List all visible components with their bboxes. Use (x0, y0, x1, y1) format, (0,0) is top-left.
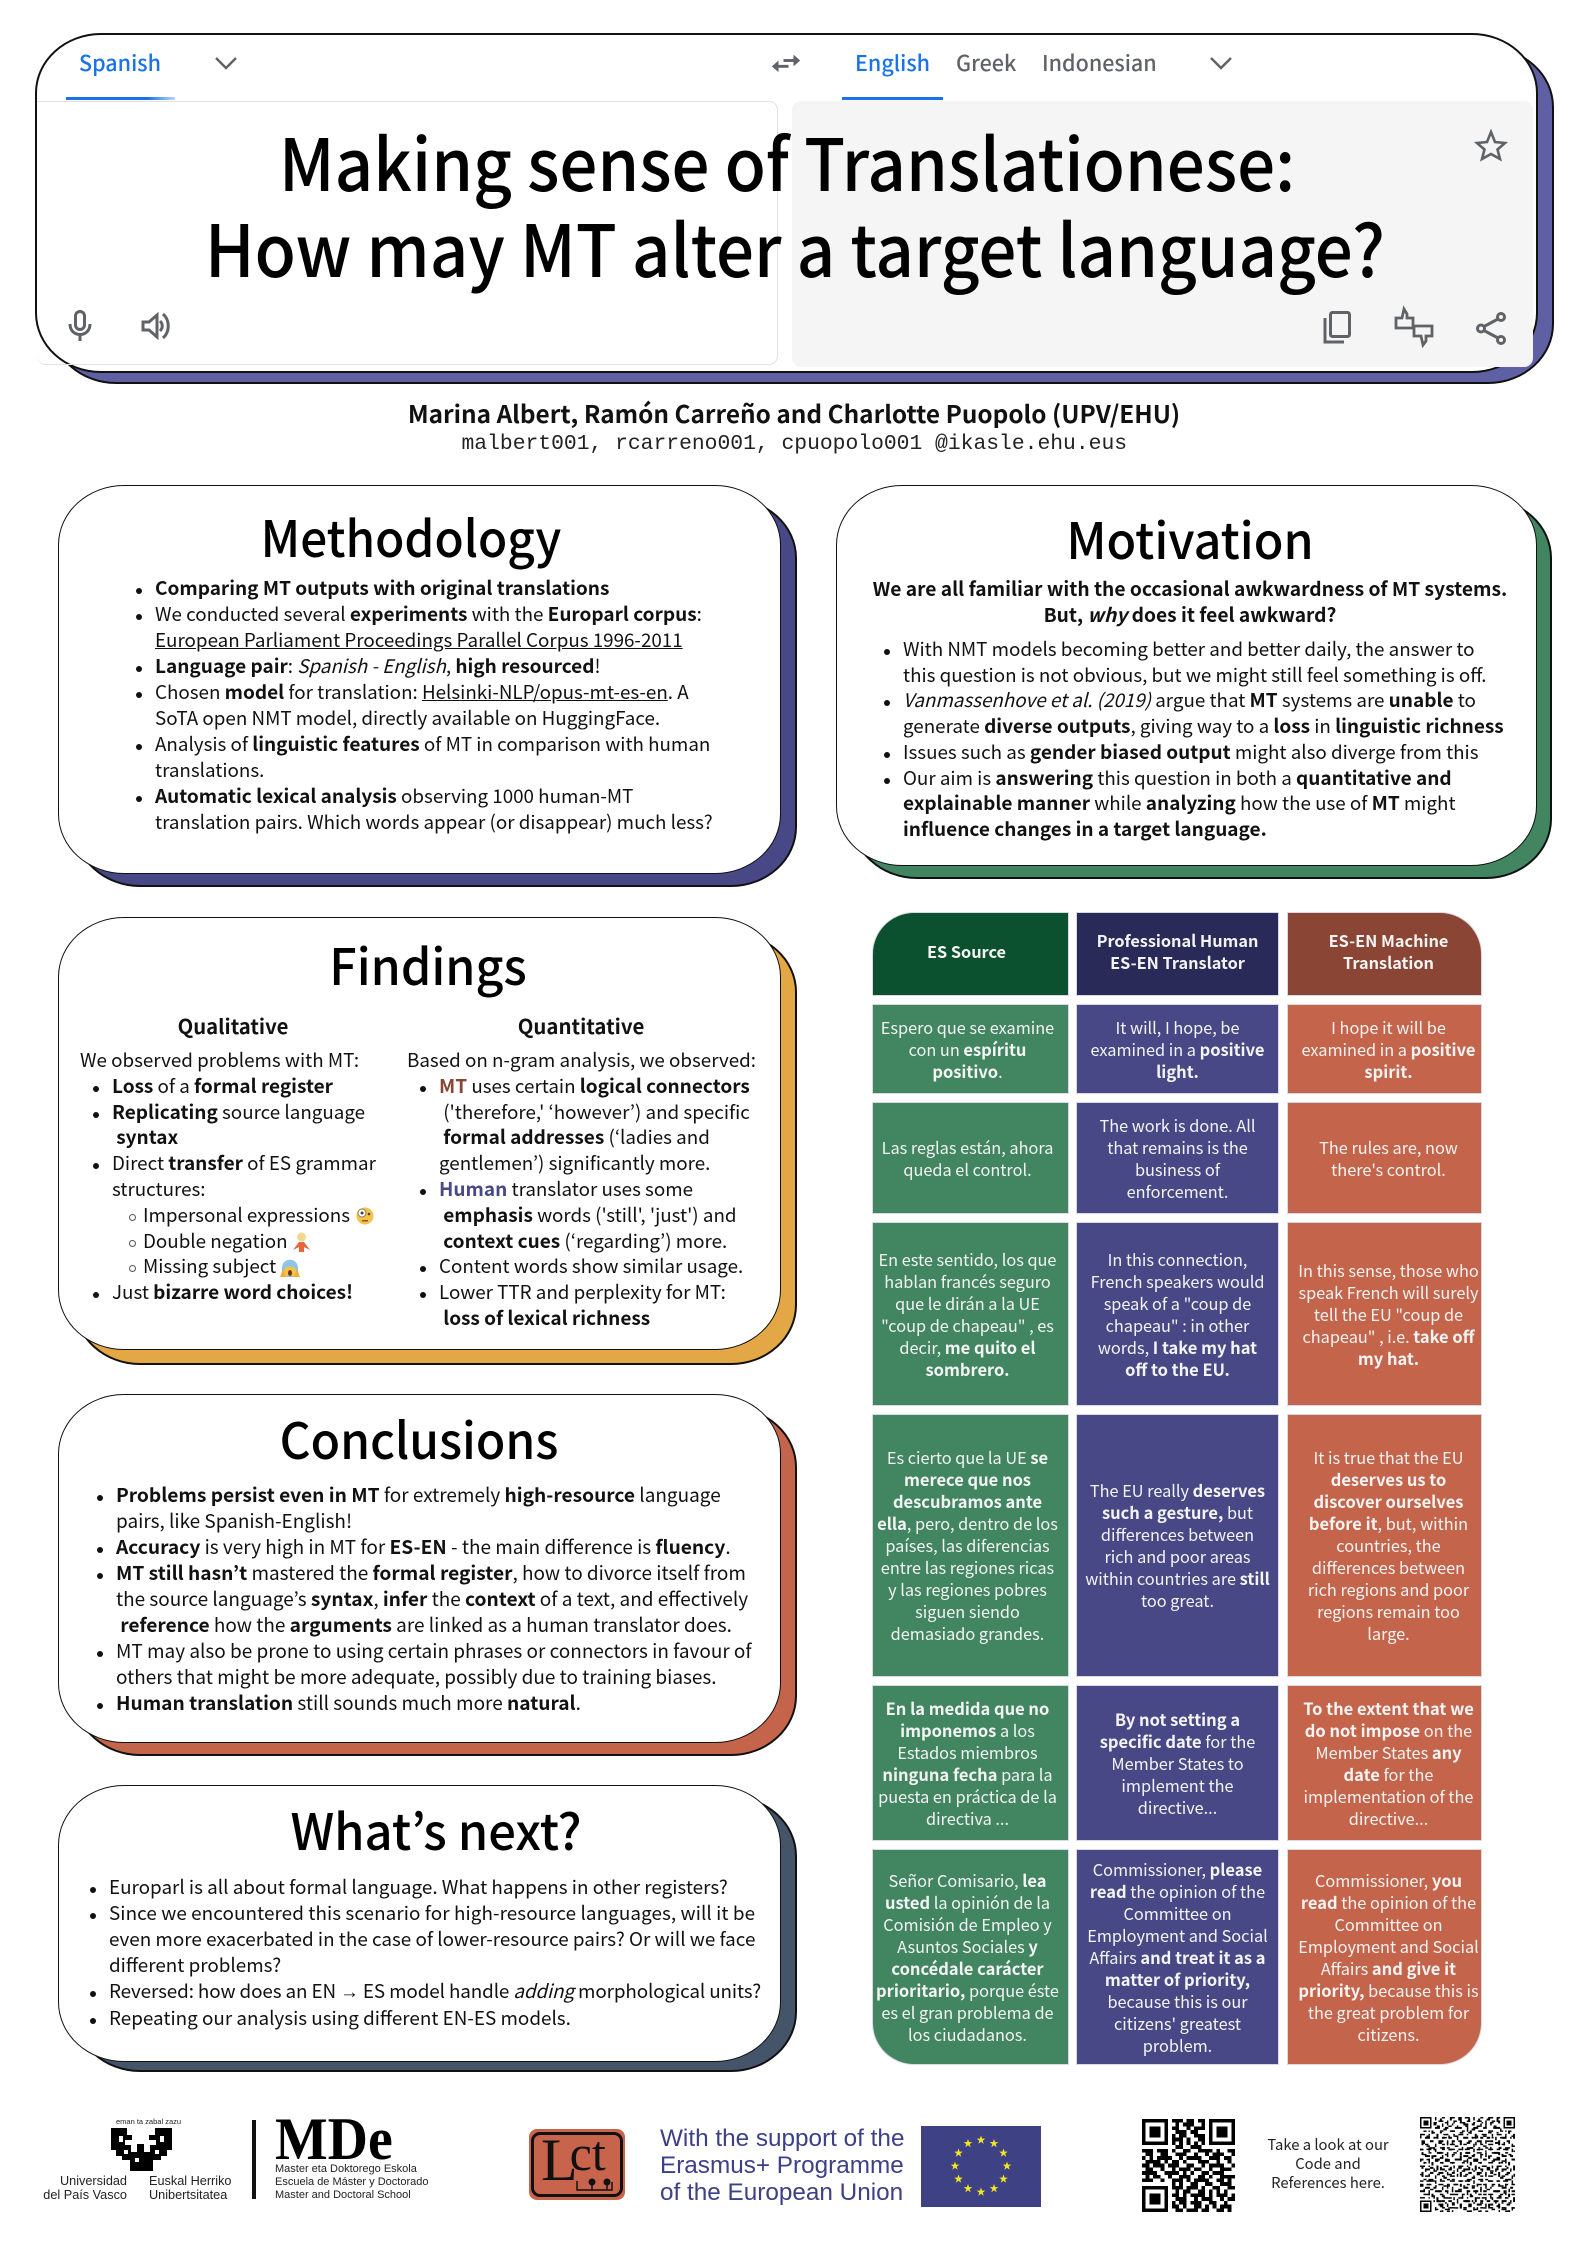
row 6 human: Employment and Social (1087, 1922, 1268, 1946)
row 3 machine: speak French will surely (1298, 1280, 1478, 1304)
column header: Professional Human ES-EN Translator (1076, 912, 1279, 996)
row 4 machine (1287, 1414, 1482, 1677)
school names (275, 2163, 428, 2201)
footer logo: University of the Basque Country (43, 2117, 232, 2202)
qualitative column text: structures: (112, 1175, 206, 1202)
motivation bullet list: generate diverse outputs, giving way to a loss in linguistic richness (903, 712, 1504, 739)
row 6 machine: Commissioner, you (1315, 1868, 1462, 1892)
conclusions bullet list: Human translation still sounds much more natural. (116, 1688, 581, 1716)
motivation bullet list: Issues such as gender biased output might also diverge from this (903, 738, 1479, 765)
row 1 machine: spirit. (1364, 1058, 1413, 1082)
row 1 machine (1287, 1004, 1482, 1094)
row 4 source (872, 1414, 1069, 1677)
panel: methodology (58, 485, 797, 887)
next steps bullet list: Reversed: how does an EN → ES model handle adding morphological units? (109, 1977, 761, 2004)
row 3 human: off to the EU. (1125, 1356, 1230, 1380)
row 6 human: Commissioner, please (1093, 1856, 1262, 1880)
quantitative column text: Human translator uses some (439, 1175, 693, 1202)
methodology bullet list: Comparing MT outputs with original translations (155, 574, 609, 601)
university name, Spanish (43, 2174, 127, 2202)
row 2 human: The work is done. All (1099, 1112, 1256, 1136)
methodology bullet list: Automatic lexical analysis observing 1000 human-MT (155, 782, 633, 809)
motivation bullet list: Vanmassenhove et al. (2019) argue that MT systems are unable to (903, 686, 1476, 713)
quantitative column text: loss of lexical richness (443, 1304, 650, 1331)
row 3 human: French speakers would (1091, 1268, 1264, 1292)
quantitative column text: emphasis words ('still', 'just') and (443, 1201, 737, 1228)
motto: eman ta zabal zazu (116, 2117, 181, 2126)
row 4 machine: regions remain too (1317, 1599, 1460, 1623)
row 2 machine (1287, 1102, 1482, 1214)
row 1 source: con un espíritu (909, 1036, 1026, 1060)
row 6 source: usted la opinión de la (885, 1890, 1050, 1914)
row 6 source: es el gran problema de (881, 2000, 1054, 2024)
quantitative column text (407, 1046, 756, 1331)
quantitative column text: Lower TTR and perplexity for MT: (439, 1278, 726, 1305)
row 6 machine: Employment and Social (1298, 1934, 1479, 1958)
methodology bullet list: Analysis of linguistic features of MT in comparison with human (155, 730, 710, 757)
row 5 source: En la medida que no (886, 1696, 1049, 1720)
row 5 machine: Member States any (1315, 1740, 1462, 1764)
row 5 human: implement the (1121, 1772, 1234, 1796)
conclusions bullet list: the source language’s syntax, infer the context of a text, and effectively (116, 1584, 748, 1612)
row 6 machine: Affairs and give it (1321, 1956, 1456, 1980)
methodology bullet list: Language pair: Spanish - English, high resourced! (155, 652, 601, 679)
row 4 source: ella, pero, dentro de los (877, 1511, 1058, 1535)
Erasmus support text: Erasmus+ Programme (660, 2152, 904, 2179)
row 3 human: In this connection, (1108, 1246, 1247, 1270)
row 4 source: entre las regiones ricas (881, 1555, 1054, 1579)
methodology bullet list: Chosen model for translation: Helsinki-NLP/opus-mt-es-en. A (155, 678, 689, 705)
quantitative column text: formal addresses (‘ladies and (443, 1123, 710, 1150)
row 4 source: y las regiones pobres (888, 1577, 1047, 1601)
row 4 source: Es cierto que la UE se (887, 1445, 1048, 1469)
school names: Escuela de Máster y Doctorado (275, 2176, 428, 2188)
row 5 source: puesta en práctica de la (878, 1784, 1057, 1808)
row 6 source: prioritario, porque éste (876, 1978, 1059, 2002)
row 5 machine: directive... (1349, 1806, 1428, 1830)
column header: Professional Human ES-EN Translator: ES-EN Translator (1110, 950, 1245, 974)
row 4 source: países, las diferencias (885, 1533, 1050, 1557)
row 3 machine: tell the EU "coup de (1314, 1302, 1463, 1326)
icon: thumbs up and down (1394, 305, 1434, 348)
tree diagram mark (576, 2178, 613, 2191)
divider between logos (252, 2120, 256, 2199)
quantitative column text: MT uses certain logical connectors (439, 1072, 750, 1099)
row 6 machine: Committee on (1334, 1912, 1443, 1936)
row 6 machine: citizens. (1357, 2022, 1420, 2046)
quantitative column text: context cues (‘regarding’) more. (443, 1227, 727, 1254)
conclusions bullet list: others that might be more adequate, possibly due to training biases. (116, 1663, 717, 1690)
row 5 machine: date for the (1344, 1762, 1433, 1786)
qualitative column text: syntax (116, 1123, 178, 1150)
emoji: person gesturing no (293, 1232, 310, 1252)
column header: ES-EN Machine Translation: Translation (1343, 950, 1434, 974)
university name, Basque (149, 2174, 232, 2202)
row 1 human: It will, I hope, be (1115, 1014, 1240, 1038)
row 6 machine: the great problem for (1308, 2000, 1469, 2024)
row 3 human: words, I take my hat (1098, 1334, 1257, 1358)
subheading: Quantitative: Quantitative (518, 1010, 644, 1040)
source text area (37, 101, 778, 365)
row 4 machine: rich regions and poor (1308, 1577, 1469, 1601)
row 2 source (872, 1102, 1069, 1214)
school names: Master and Doctoral School (275, 2189, 411, 2201)
row 6 source: Señor Comisario, lea (888, 1868, 1047, 1892)
methodology bullet list: SoTA open NMT model, directly available on HuggingFace. (155, 704, 660, 731)
row 3 machine: my hat. (1358, 1346, 1419, 1370)
qualitative column text: Just bizarre word choices! (112, 1278, 353, 1305)
row 1 source: positivo. (932, 1058, 1003, 1082)
row 5 source (872, 1685, 1069, 1841)
emoji: face with monocle (356, 1208, 374, 1224)
row 5 source: imponemos a los (900, 1718, 1035, 1742)
row 1 human: examined in a positive (1090, 1036, 1265, 1060)
qualitative column text: Loss of a formal register (112, 1072, 333, 1099)
methodology bullet list: European Parliament Proceedings Parallel Corpus 1996-2011 (155, 626, 683, 653)
row 2 human: enforcement. (1127, 1178, 1228, 1202)
row 6 human: read the opinion of the (1090, 1878, 1265, 1902)
row 3 source: hablan francés seguro (884, 1268, 1051, 1292)
row 5 source: Estados miembros (897, 1740, 1038, 1764)
tab: Spanish: Spanish (79, 47, 161, 78)
row 6 human: problem. (1143, 2032, 1212, 2056)
university name, Basque: Unibertsitatea (149, 2188, 227, 2202)
row 4 machine: It is true that the EU (1313, 1445, 1464, 1469)
comparison table (872, 912, 1482, 2065)
qualitative column text (80, 1046, 376, 1305)
methodology bullet list (136, 574, 713, 835)
row 4 source: siguen siendo (915, 1599, 1020, 1623)
heading: Methodology: Methodology (261, 500, 561, 572)
methodology bullet list: translation pairs. Which words appear (or disappear) much less? (155, 808, 713, 835)
next steps bullet list (90, 1873, 761, 2031)
next steps bullet list: even more exacerbated in the case of lower-resource pairs? Or will we face (109, 1925, 755, 1952)
next steps bullet list: different problems? (109, 1951, 281, 1978)
row 6 source (872, 1849, 1069, 2065)
tab: Greek: Greek (956, 47, 1016, 78)
QR prompt text: References here. (1271, 2172, 1385, 2193)
row 5 source: directiva ... (926, 1806, 1009, 1830)
row 4 machine: differences between (1312, 1555, 1465, 1579)
row 3 machine: In this sense, those who (1298, 1258, 1479, 1282)
motivation bullet list: Our aim is answering this question in both a quantitative and (903, 764, 1452, 791)
conclusions bullet list: Accuracy is very high in MT for ES-EN - the main difference is fluency. (116, 1532, 731, 1560)
row 1 source (872, 1004, 1069, 1094)
row 2 human: that remains is the (1107, 1134, 1248, 1158)
email line: malbert001, rcarreno001, cpuopolo001 @ikasle.ehu.eus (462, 432, 1127, 456)
row 4 machine: discover ourselves (1314, 1489, 1463, 1513)
row 2 human: business of (1135, 1156, 1220, 1180)
row 4 human: such a gesture, but (1102, 1500, 1253, 1524)
row 6 human (1076, 1849, 1279, 2065)
row 3 source: sombrero. (925, 1356, 1010, 1380)
Erasmus support text: With the support of the (660, 2125, 904, 2152)
row 3 source: decir, me quito el (899, 1334, 1036, 1358)
row 6 human: Affairs and treat it as a (1089, 1944, 1266, 1968)
methodology bullet list: We conducted several experiments with the Europarl corpus: (155, 600, 702, 627)
panel: conclusions (58, 1394, 797, 1756)
row 3 source: que le dirán a la UE (895, 1290, 1040, 1314)
footer logo: LCT (529, 2129, 625, 2200)
title line 2: How may MT alter a target language? (204, 193, 1385, 298)
row 3 source: "coup de chapeau" , es (881, 1312, 1054, 1336)
motivation bullet list: influence changes in a target language. (903, 815, 1267, 842)
conclusions bullet list: pairs, like Spanish-English! (116, 1507, 352, 1534)
authors line: Marina Albert, Ramón Carreño and Charlotte Puopolo (UPV/EHU) (408, 396, 1180, 431)
row 6 machine: priority, because this is (1298, 1978, 1479, 2002)
qualitative column text: Missing subject (143, 1252, 276, 1279)
icon: share (1476, 312, 1506, 345)
conclusions bullet list: Problems persist even in MT for extremely high-resource language (116, 1480, 721, 1508)
qualitative column text: Double negation (143, 1227, 288, 1254)
motivation bullet list: With NMT models becoming better and better daily, the answer to (903, 635, 1475, 662)
row 4 human: differences between (1101, 1522, 1254, 1546)
row 6 human: matter of priority, (1105, 1966, 1250, 1990)
row 2 human (1076, 1102, 1279, 1214)
university name, Spanish: del País Vasco (43, 2188, 127, 2202)
motivation bullet list: this question is not obvious, but we might still feel something is off. (903, 661, 1486, 688)
row 5 machine (1287, 1685, 1482, 1841)
row 4 source: descubramos ante (893, 1489, 1042, 1513)
Erasmus support text (660, 2125, 904, 2206)
motivation intro: But, why does it feel awkward? (1044, 600, 1336, 628)
row 6 human: Committee on (1123, 1900, 1232, 1924)
next steps bullet list: Repeating our analysis using different EN-ES models. (109, 2004, 571, 2031)
row 6 source: concédale carácter (891, 1956, 1044, 1980)
icon: copy (1324, 311, 1351, 344)
qualitative column text: Impersonal expressions (143, 1201, 350, 1228)
row 5 human: By not setting a (1115, 1706, 1240, 1730)
panel: what's next (58, 1785, 797, 2072)
conclusions bullet list: MT still hasn’t mastered the formal register, how to divorce itself from (116, 1558, 746, 1586)
translated text area (792, 101, 1533, 367)
row 1 machine: I hope it will be (1331, 1014, 1446, 1038)
row 1 human (1076, 1004, 1279, 1094)
row 4 source: merece que nos (904, 1467, 1031, 1491)
row 3 source (872, 1222, 1069, 1406)
row 4 source: demasiado grandes. (891, 1621, 1044, 1645)
row 4 machine: countries, the (1336, 1533, 1441, 1557)
tab underline: English (842, 97, 943, 100)
QR prompt text: Take a look at our (1267, 2134, 1389, 2155)
heading: What's next?: What’s next? (290, 1793, 582, 1865)
row 5 human: specific date for the (1100, 1728, 1255, 1752)
next steps bullet list: Since we encountered this scenario for high-resource languages, will it be (109, 1899, 755, 1926)
row 5 human (1076, 1685, 1279, 1841)
row 5 source: ninguna fecha para la (882, 1762, 1053, 1786)
qualitative column text: We observed problems with MT: (80, 1046, 359, 1073)
row 3 source: En este sentido, los que (879, 1246, 1056, 1270)
QR prompt text (1267, 2134, 1389, 2193)
row 5 machine: do not impose on the (1305, 1718, 1472, 1742)
qualitative column text: Direct transfer of ES grammar (112, 1149, 376, 1176)
row 4 human: too great. (1141, 1588, 1214, 1612)
emoji: screaming face (280, 1260, 300, 1277)
row 5 machine: implementation of the (1304, 1784, 1473, 1808)
conclusions bullet list: MT may also be prone to using certain phrases or connectors in favour of (116, 1637, 752, 1664)
conclusions bullet list (97, 1480, 752, 1716)
row 3 human (1076, 1222, 1279, 1406)
school names: Master eta Doktorego Eskola (275, 2163, 417, 2175)
icon: swap languages (772, 54, 800, 72)
quantitative column text: Based on n-gram analysis, we observed: (407, 1046, 756, 1073)
qualitative column text: Replicating source language (112, 1098, 365, 1125)
row 4 human (1076, 1414, 1279, 1677)
row 1 human: light. (1156, 1058, 1199, 1082)
row 4 human: rich and poor areas (1104, 1544, 1251, 1568)
tab: Indonesian: Indonesian (1042, 47, 1157, 78)
motivation bullet list: explainable manner while analyzing how the use of MT might (903, 789, 1456, 816)
QR code: code repository (1142, 2119, 1235, 2212)
row 3 human: speak of a "coup de (1104, 1290, 1251, 1314)
tab: English: English (855, 47, 930, 78)
MDe wordmark: MDe (275, 2106, 393, 2172)
row 4 human: within countries are still (1085, 1566, 1270, 1590)
row 2 source: Las reglas están, ahora (882, 1134, 1053, 1158)
row 2 source: queda el control. (903, 1156, 1032, 1180)
icon: microphone (68, 310, 92, 341)
heading: Conclusions: Conclusions (280, 1402, 558, 1474)
row 5 machine: To the extent that we (1303, 1696, 1474, 1720)
panel: findings (58, 917, 797, 1365)
icon: source dropdown chevron (215, 57, 237, 70)
icon: EU flag (921, 2126, 1041, 2207)
quantitative column text: ('therefore,' ‘however’) and specific (443, 1098, 750, 1125)
title line 1: Making sense of Translationese: (279, 107, 1295, 212)
column header: ES-EN Machine Translation: ES-EN Machine (1329, 928, 1448, 952)
row 6 human: because this is our (1107, 1988, 1248, 2012)
QR code: references (1420, 2117, 1515, 2212)
row 4 machine: deserves us to (1331, 1467, 1446, 1491)
motivation bullet list (884, 635, 1504, 842)
row 1 source: Espero que se examine (881, 1014, 1054, 1038)
row 6 machine (1287, 1849, 1482, 2065)
row 4 human: The EU really deserves (1090, 1478, 1265, 1502)
quantitative column text: gentlemen’) significantly more. (439, 1149, 710, 1176)
icon: speaker (142, 312, 170, 340)
university name, Basque: Euskal Herriko (149, 2174, 232, 2188)
university name, Spanish: Universidad (60, 2174, 127, 2188)
icon: target dropdown chevron (1210, 57, 1232, 70)
tab underline: Spanish (66, 97, 175, 100)
row 6 source: Comisión de Empleo y (883, 1912, 1052, 1936)
column header: ES Source: ES Source (927, 938, 1006, 962)
panel: motivation (836, 485, 1552, 879)
header panel: translator interface (35, 33, 1554, 384)
row 6 machine: read the opinion of the (1301, 1890, 1476, 1914)
row 5 human: directive... (1138, 1794, 1217, 1818)
QR prompt text: Code and (1295, 2153, 1361, 2174)
motivation intro: We are all familiar with the occasional awkwardness of MT systems. (873, 574, 1507, 602)
subheading: Qualitative: Qualitative (178, 1010, 288, 1040)
footer logo: Master and Doctoral School (275, 2106, 428, 2201)
row 2 machine: The rules are, now (1319, 1134, 1458, 1158)
Erasmus support text: of the European Union (660, 2179, 903, 2206)
row 6 source: los ciudadanos. (908, 2022, 1027, 2046)
Lct wordmark: Lct (541, 2125, 606, 2193)
row 1 machine: examined in a positive (1301, 1036, 1476, 1060)
icon: star (1474, 128, 1508, 162)
column header: ES Source (872, 912, 1069, 996)
column header: ES-EN Machine Translation (1287, 912, 1482, 996)
conclusions bullet list: reference how the arguments are linked as a human translator does. (120, 1610, 732, 1638)
row 3 machine: chapeau" , i.e. take off (1302, 1324, 1474, 1348)
row 5 human: Member States to (1111, 1750, 1244, 1774)
row 4 machine: large. (1367, 1621, 1410, 1645)
column header: Professional Human ES-EN Translator: Professional Human (1097, 928, 1258, 952)
row 3 machine (1287, 1222, 1482, 1406)
quantitative column text: Content words show similar usage. (439, 1252, 743, 1279)
row 6 human: citizens' greatest (1114, 2010, 1241, 2034)
heading: Findings: Findings (329, 928, 527, 1000)
motivation intro (873, 574, 1507, 628)
next steps bullet list: Europarl is all about formal language. What happens in other registers? (109, 1873, 728, 1900)
row 4 machine: before it, but, within (1309, 1511, 1468, 1535)
row 6 source: Asuntos Sociales y (897, 1934, 1038, 1958)
row 2 machine: there's control. (1331, 1156, 1446, 1180)
heading: Motivation: Motivation (1066, 502, 1314, 574)
methodology bullet list: translations. (155, 756, 264, 783)
emblem (111, 2128, 172, 2171)
row 3 human: chapeau" : in other (1106, 1312, 1249, 1336)
